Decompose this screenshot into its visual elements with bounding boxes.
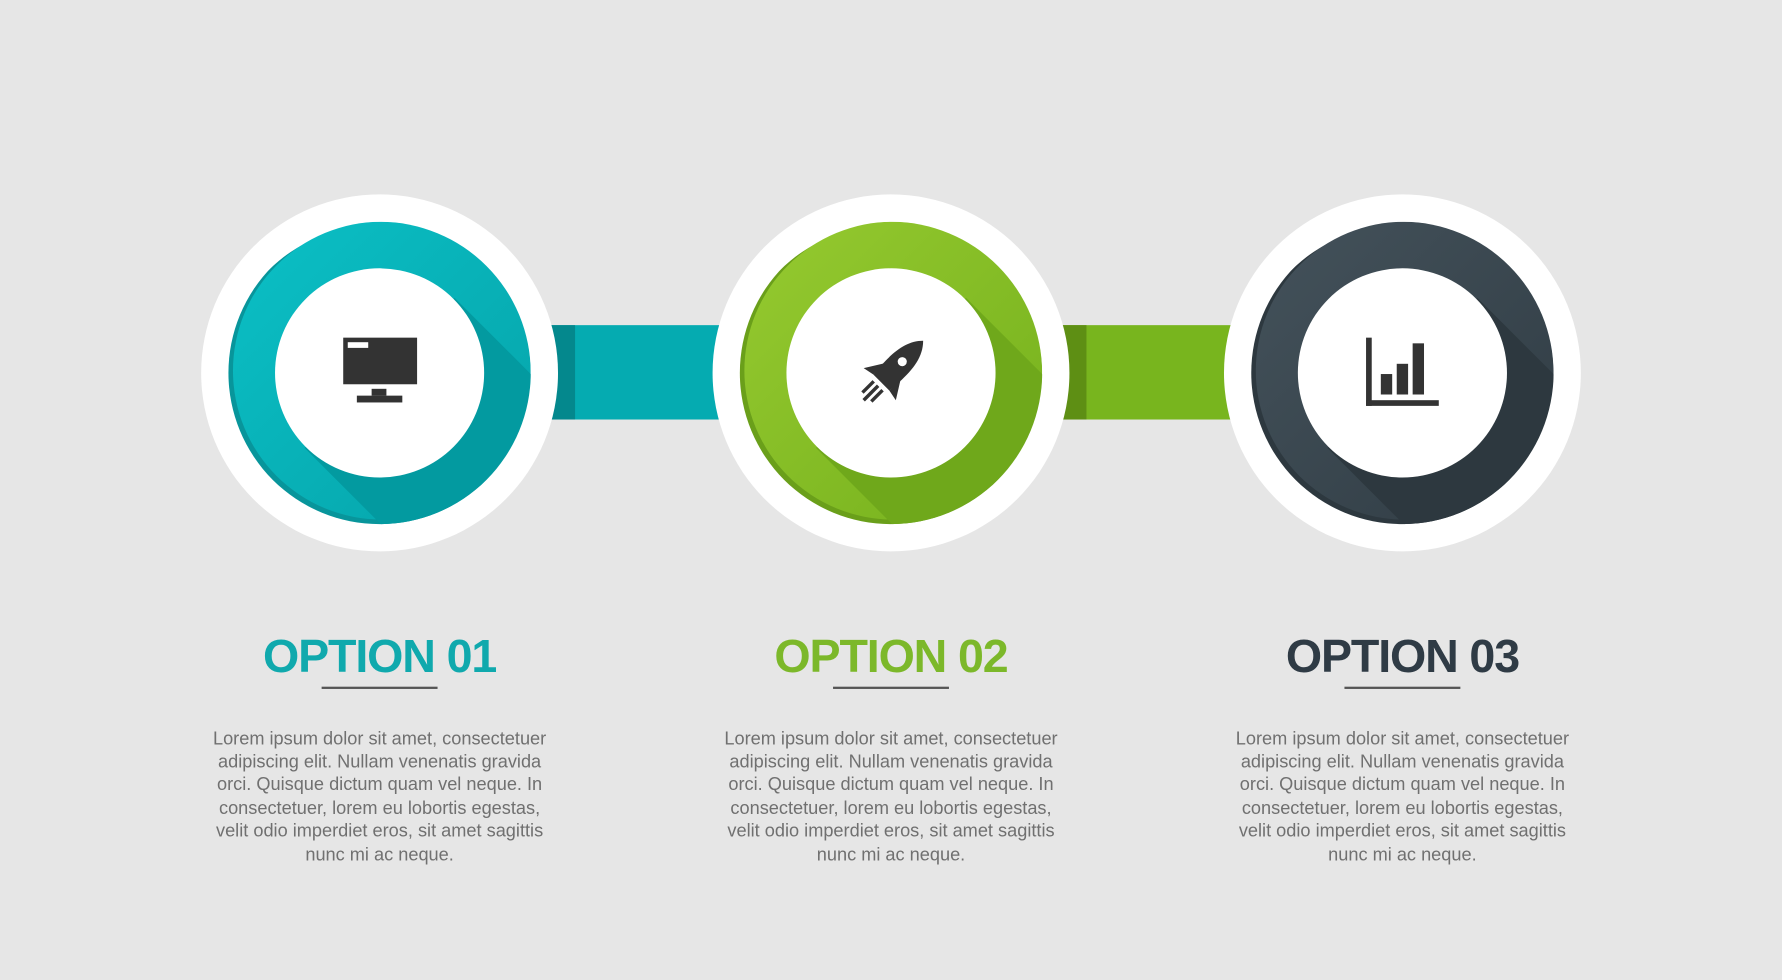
connector bar 1 <box>546 325 727 420</box>
title 03: OPTION 03 <box>1286 630 1519 682</box>
body 01: adipiscing elit. Nullam venenatis gravida <box>218 751 542 771</box>
body 02: nunc mi ac neque. <box>817 845 965 865</box>
body 03: Lorem ipsum dolor sit amet, consectetuer <box>1236 729 1569 749</box>
body 02: consectetuer, lorem eu lobortis egestas, <box>730 798 1052 818</box>
option 03 text block <box>1236 630 1569 865</box>
body 01: nunc mi ac neque. <box>305 845 454 865</box>
body 01: Lorem ipsum dolor sit amet, consectetuer <box>213 729 546 749</box>
body 02: adipiscing elit. Nullam venenatis gravida <box>729 751 1053 771</box>
body 01: orci. Quisque dictum quam vel neque. In <box>217 774 542 794</box>
body 03: orci. Quisque dictum quam vel neque. In <box>1240 774 1565 794</box>
connector bar 2 <box>1057 325 1239 420</box>
title 02: OPTION 02 <box>774 630 1008 682</box>
step 2 circle <box>712 194 1070 552</box>
body 03: nunc mi ac neque. <box>1328 845 1477 865</box>
icon: bar chart <box>1366 338 1439 406</box>
infographic canvas <box>201 194 1581 864</box>
icon: monitor <box>343 338 417 402</box>
option 01 text block <box>213 630 546 865</box>
step 1 circle <box>201 194 558 552</box>
body 03 <box>1236 729 1569 865</box>
body 03: consectetuer, lorem eu lobortis egestas, <box>1242 798 1563 818</box>
option 02 text block <box>724 630 1058 865</box>
body 01: consectetuer, lorem eu lobortis egestas, <box>219 798 540 818</box>
body 02: Lorem ipsum dolor sit amet, consectetuer <box>724 729 1058 749</box>
icon: rocket <box>848 325 939 416</box>
body 03: velit odio imperdiet eros, sit amet sagittis <box>1239 821 1566 841</box>
body 01 <box>213 729 546 865</box>
body 02: velit odio imperdiet eros, sit amet sagittis <box>727 821 1055 841</box>
body 01: velit odio imperdiet eros, sit amet sagittis <box>216 821 543 841</box>
body 02: orci. Quisque dictum quam vel neque. In <box>728 774 1054 794</box>
body 03: adipiscing elit. Nullam venenatis gravida <box>1241 751 1565 771</box>
step 3 circle <box>1224 194 1581 552</box>
body 02 <box>724 729 1058 865</box>
title 01: OPTION 01 <box>263 630 496 682</box>
